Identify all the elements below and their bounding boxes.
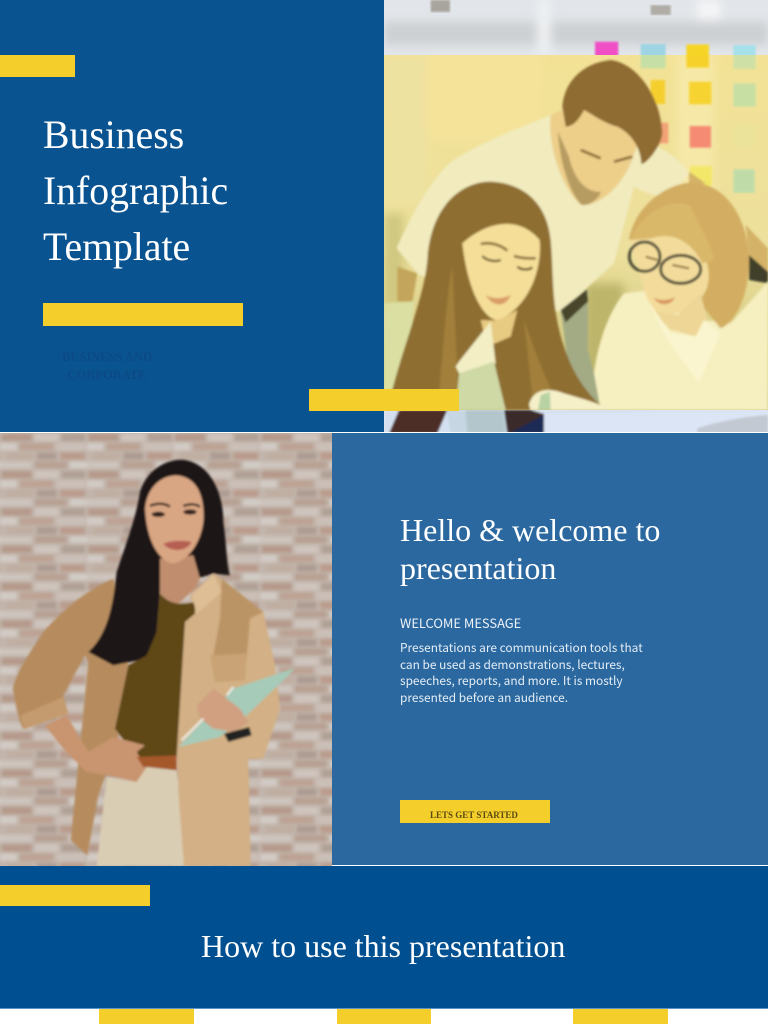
text block: welcome body: can be used as demonstrations, lectures, (400, 656, 625, 673)
accent bar: top left (0, 55, 75, 77)
text block: welcome body: Presentations are communication tools that (400, 639, 643, 656)
man (397, 267, 417, 302)
left woman (384, 301, 414, 389)
heading: how to use this presentation: How to use this presentation (201, 928, 565, 964)
accent block: bottom right (573, 1009, 668, 1024)
accent bar: overlapping photo (309, 389, 459, 411)
panel: welcome (332, 433, 768, 865)
title: Infographic (43, 169, 228, 213)
heading: hello and welcome: Hello & welcome to (400, 512, 660, 548)
title: Template (43, 225, 190, 269)
subtitle: business and corporate (62, 350, 152, 382)
panel: title background (0, 0, 384, 432)
right woman (594, 282, 768, 410)
photo: woman holding tablet in front of brick wall (0, 433, 332, 866)
text block: welcome body (400, 639, 643, 706)
button: lets get started: LETS GET STARTED (430, 810, 518, 820)
text block: welcome body: speeches, reports, and more. It is mostly (400, 672, 623, 689)
panel: how to use (0, 866, 768, 1009)
subtitle: business and corporate: BUSINESS AND (62, 350, 152, 364)
accent block: bottom left (99, 1009, 194, 1024)
heading: hello and welcome: presentation (400, 550, 556, 586)
accent bar: under title (43, 303, 243, 326)
text block: welcome body: presented before an audience. (400, 689, 568, 706)
photo: team of three colleagues with yellow overlay (384, 0, 768, 432)
accent bar: how to use panel (0, 885, 150, 906)
subheading: welcome message: WELCOME MESSAGE (400, 613, 521, 632)
button: lets get started (400, 800, 550, 823)
accent block: bottom centre (337, 1009, 431, 1024)
subtitle: business and corporate: CORPORATE (68, 368, 146, 382)
title: Business (43, 113, 184, 157)
title (43, 113, 228, 269)
heading: hello and welcome (400, 512, 660, 586)
book (529, 390, 604, 410)
